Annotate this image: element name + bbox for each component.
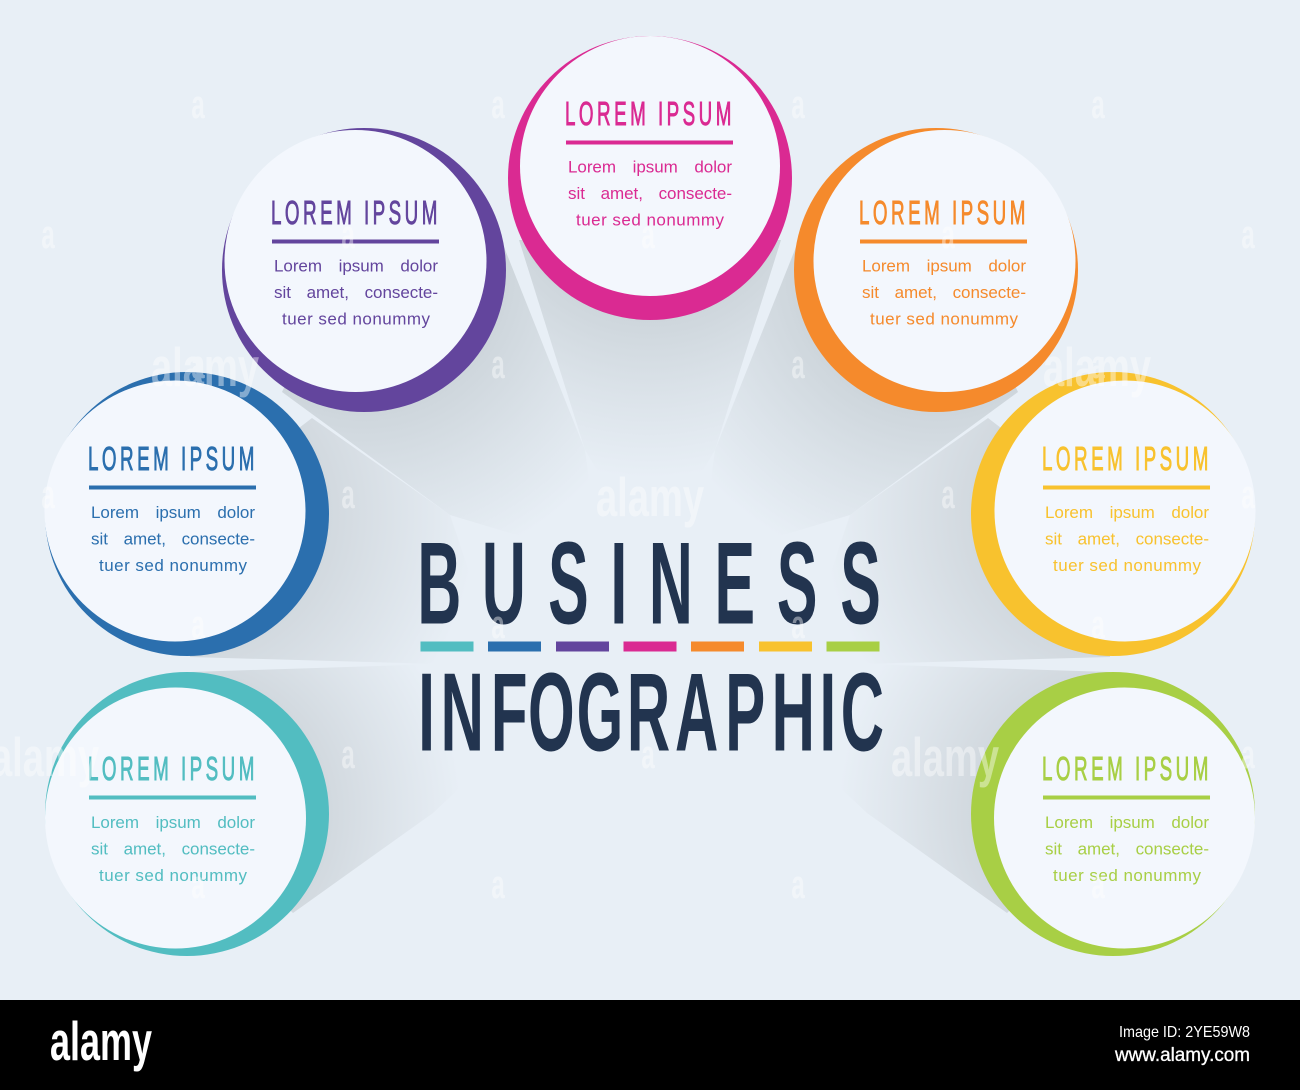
- teal body text: tuer sed nonummy: [99, 866, 248, 885]
- image id: Image ID: 2YE59W8: [1119, 1024, 1250, 1041]
- green rule: [1043, 796, 1210, 800]
- blue body text: tuer sed nonummy: [99, 556, 248, 575]
- yellow body text: Lorem ipsum dolor: [1045, 503, 1209, 522]
- footer logo: alamy: [50, 1010, 152, 1072]
- panel: blue circle: [44, 372, 329, 656]
- panel: teal circle: [45, 672, 329, 956]
- site url: www.alamy.com: [1114, 1045, 1250, 1066]
- pink body text: [568, 158, 732, 230]
- watermark overlay: [0, 82, 1255, 906]
- green heading: LOREM IPSUM: [1042, 751, 1212, 787]
- blue heading: LOREM IPSUM: [88, 441, 258, 477]
- green body text: sit amet, consecte-: [1045, 840, 1209, 858]
- panel: purple circle: [222, 128, 506, 412]
- colour bars divider: [420, 642, 880, 652]
- blue body text: Lorem ipsum dolor: [91, 503, 255, 522]
- blue rule: [89, 486, 256, 490]
- watermark overlay: alamy: [151, 336, 259, 398]
- panel: orange circle: [794, 128, 1078, 412]
- panel: pink circle: [508, 36, 792, 320]
- orange body text: [862, 256, 1026, 328]
- watermark overlay: alamy: [891, 726, 999, 788]
- teal body text: [91, 813, 255, 885]
- purple heading: LOREM IPSUM: [271, 195, 441, 231]
- teal body text: sit amet, consecte-: [91, 840, 255, 858]
- blue body text: sit amet, consecte-: [91, 530, 255, 548]
- pink body text: sit amet, consecte-: [568, 184, 732, 203]
- pink body text: tuer sed nonummy: [576, 210, 724, 230]
- watermark overlay: aaaaa: [41, 212, 1255, 256]
- purple body text: Lorem ipsum dolor: [274, 256, 438, 276]
- blue body text: [91, 503, 255, 575]
- green body text: [1045, 813, 1209, 885]
- yellow heading: LOREM IPSUM: [1042, 441, 1212, 477]
- title: INFOGRAPHIC: INFOGRAPHIC: [418, 650, 884, 774]
- watermark overlay: aaaa: [41, 472, 1255, 516]
- panel: green circle: [971, 672, 1255, 956]
- purple rule: [272, 240, 439, 244]
- teal body text: Lorem ipsum dolor: [91, 813, 255, 832]
- pink rule: [566, 140, 733, 144]
- title: BUSINESS: BUSINESS: [417, 518, 881, 649]
- orange body text: sit amet, consecte-: [862, 283, 1026, 302]
- watermark overlay: aaa: [341, 732, 1255, 776]
- orange rule: [860, 240, 1027, 244]
- green body text: tuer sed nonummy: [1053, 866, 1202, 885]
- teal heading: LOREM IPSUM: [88, 751, 258, 787]
- teal rule: [89, 796, 256, 800]
- watermark overlay: alamy: [596, 466, 704, 528]
- purple body text: tuer sed nonummy: [282, 310, 430, 328]
- panel: yellow circle: [971, 372, 1256, 656]
- footer bar: [0, 1000, 1300, 1090]
- yellow body text: sit amet, consecte-: [1045, 530, 1209, 548]
- orange body text: tuer sed nonummy: [870, 310, 1018, 328]
- purple body text: sit amet, consecte-: [274, 283, 438, 302]
- orange body text: Lorem ipsum dolor: [862, 256, 1026, 276]
- purple body text: [274, 256, 438, 328]
- pink body text: Lorem ipsum dolor: [568, 158, 732, 176]
- yellow body text: [1045, 503, 1209, 575]
- pink heading: LOREM IPSUM: [565, 96, 735, 132]
- yellow body text: tuer sed nonummy: [1053, 556, 1202, 575]
- watermark overlay: aaaa: [191, 342, 1105, 386]
- watermark overlay: aaaa: [191, 602, 1105, 646]
- watermark overlay: alamy: [1043, 336, 1151, 398]
- watermark overlay: aaaa: [191, 862, 1105, 906]
- orange heading: LOREM IPSUM: [859, 195, 1029, 231]
- yellow rule: [1043, 486, 1210, 490]
- green body text: Lorem ipsum dolor: [1045, 813, 1209, 832]
- watermark overlay: aaaa: [191, 82, 1105, 126]
- long shadows and light rays behind the circles: [187, 240, 1113, 913]
